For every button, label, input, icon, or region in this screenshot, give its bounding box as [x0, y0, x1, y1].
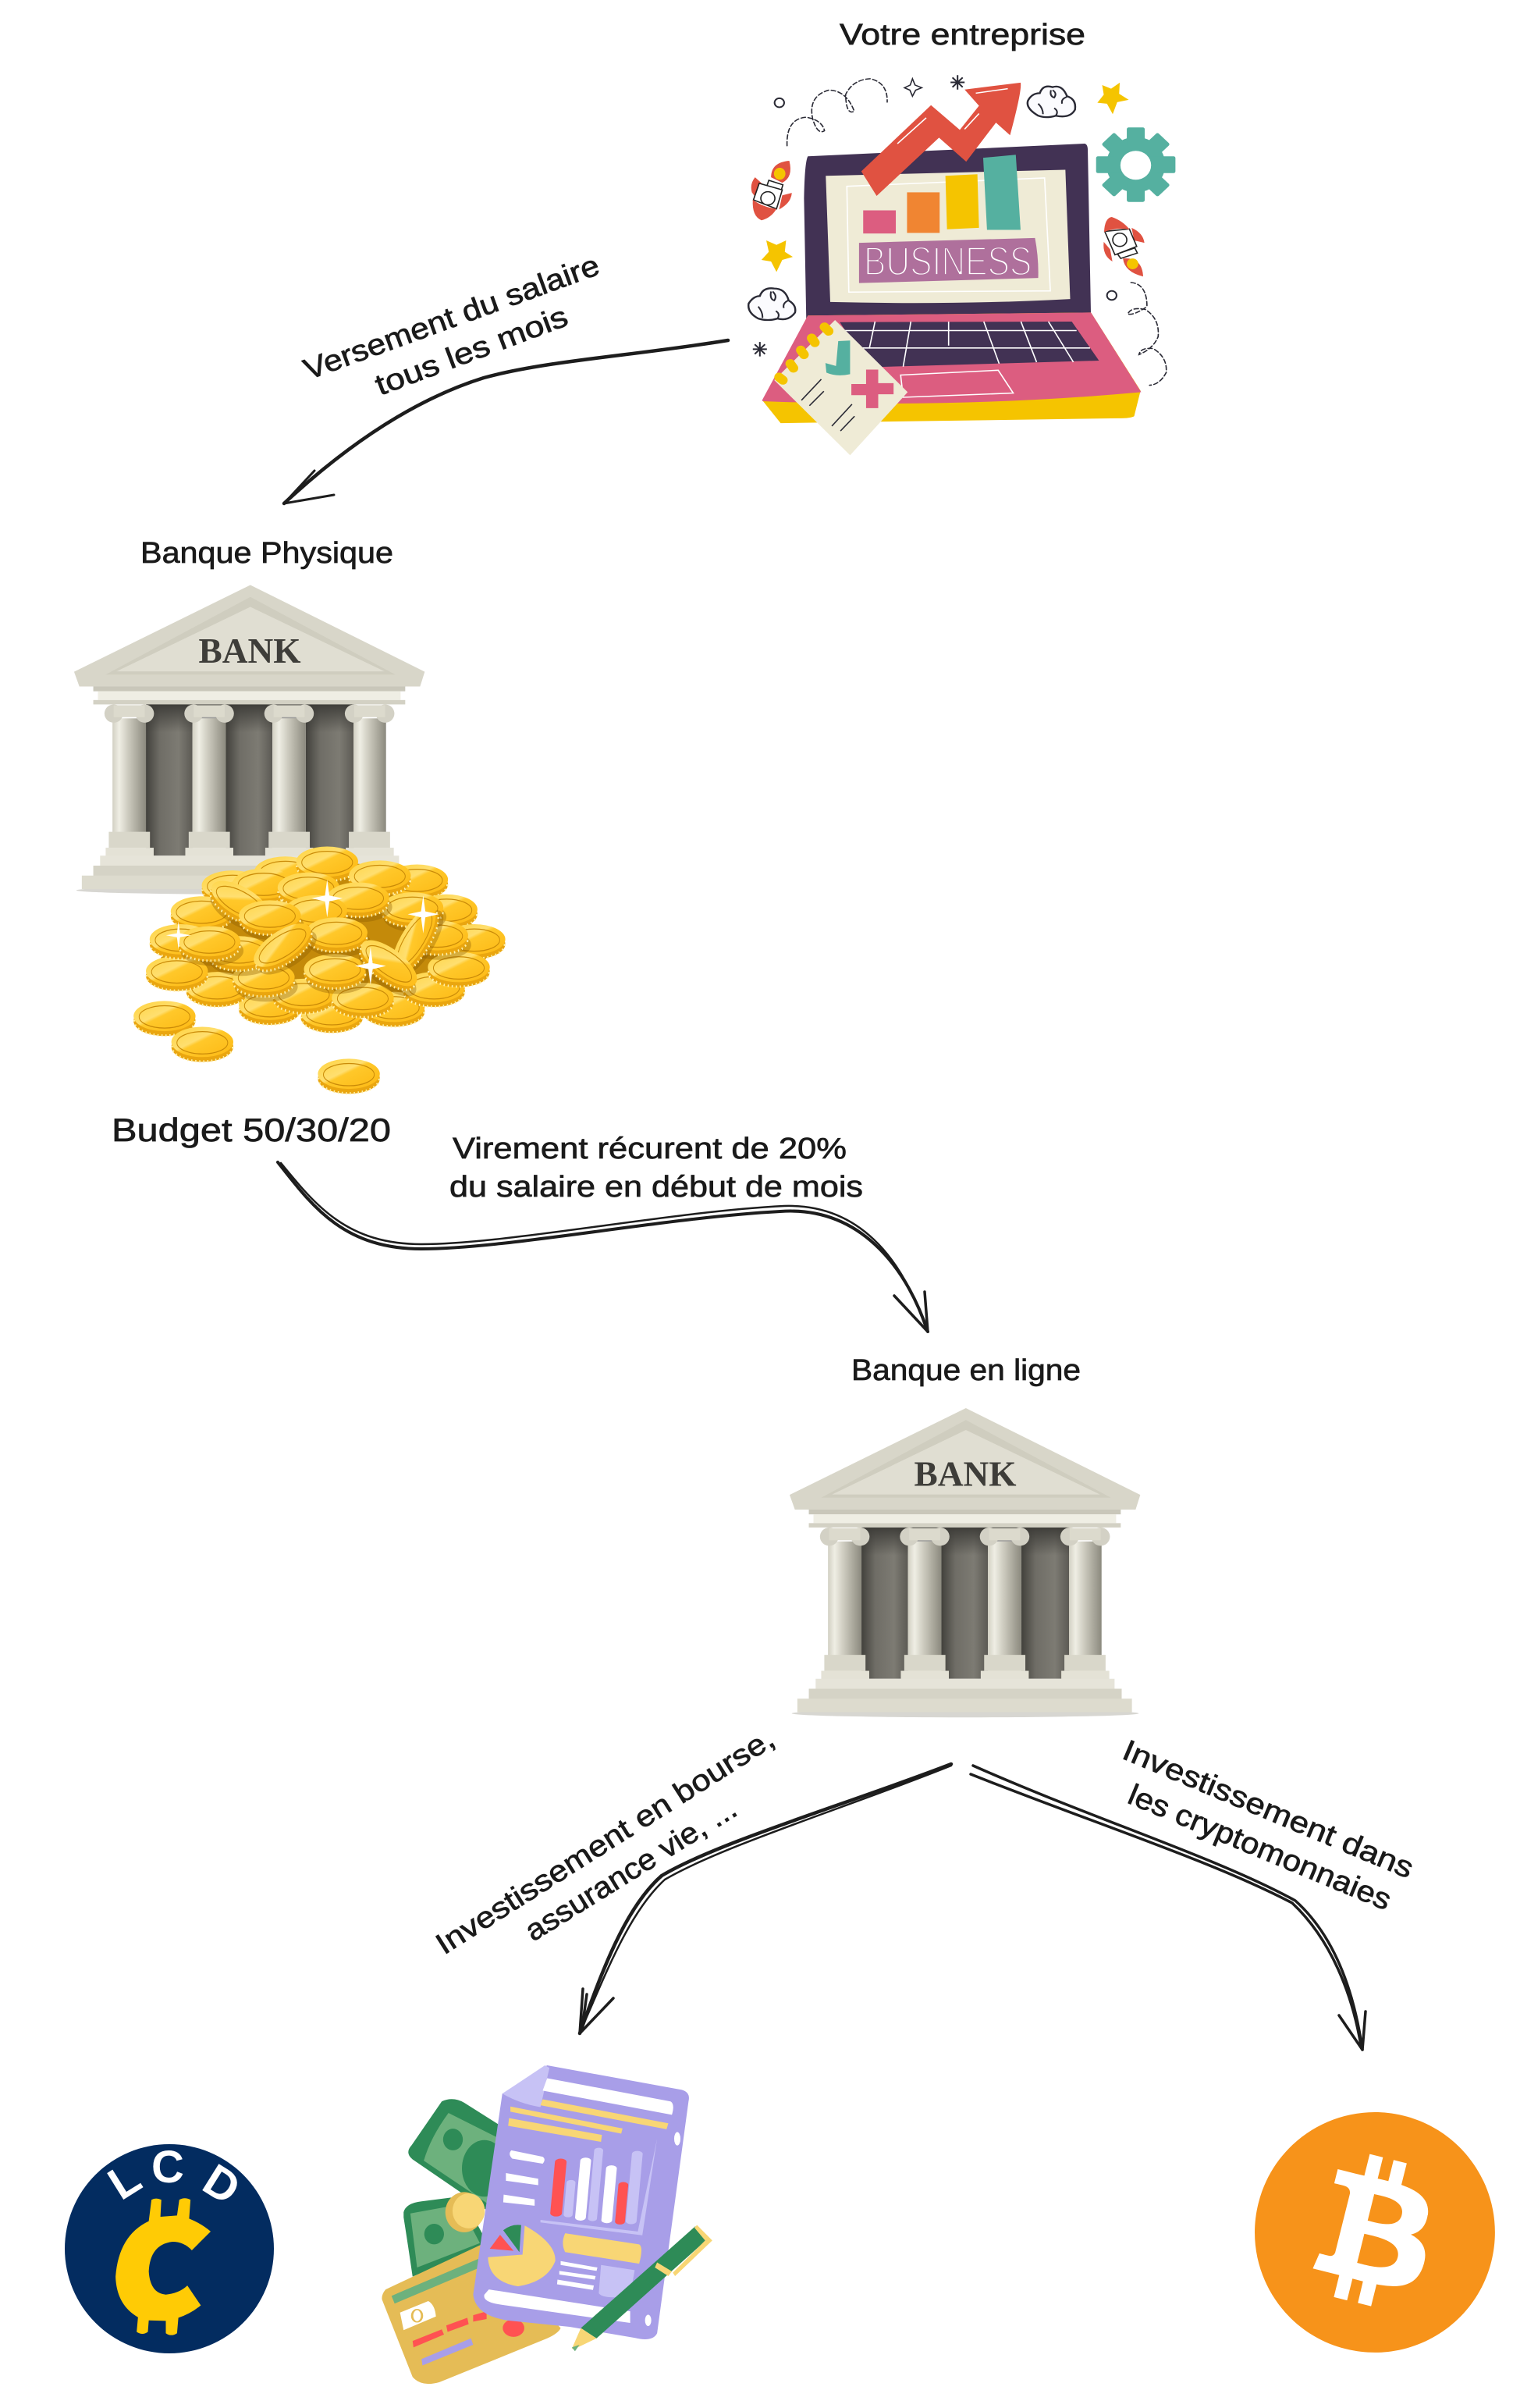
label: investissement en bourse: assurance vie, ... — [520, 1792, 743, 1948]
icon: online bank building: BANK — [915, 1453, 1017, 1493]
label: investissement en bourse: Investissement en bourse, — [430, 1723, 780, 1962]
letters L C D — [99, 2142, 249, 2214]
label: virement récurrent: du salaire en début de mois — [449, 1171, 863, 1204]
clouds — [748, 87, 1075, 320]
label: investissement crypto: Investissement dans — [1118, 1734, 1419, 1885]
icon: online bank building — [790, 1408, 1140, 1717]
label: Budget 50/30/20: Budget 50/30/20 — [112, 1112, 391, 1148]
doodles and dashed loops — [753, 75, 1167, 386]
icon: investment documents, money and card — [382, 2065, 712, 2384]
logo: LCD coin — [65, 2142, 274, 2353]
notepad — [774, 320, 907, 455]
coin C symbol — [115, 2198, 211, 2335]
laptop screen — [804, 144, 1091, 318]
label: investissement crypto — [1118, 1734, 1419, 1917]
laptop keyboard base — [762, 312, 1142, 423]
icon: laptop business illustration — [748, 75, 1175, 455]
icon: physical bank building: BANK — [199, 631, 301, 670]
title: Votre entreprise: Votre entreprise — [840, 19, 1085, 52]
pen — [572, 2225, 712, 2351]
label: investissement crypto: les cryptomonnaies — [1124, 1779, 1396, 1917]
gear — [1096, 127, 1175, 202]
letters L C D: C — [151, 2142, 184, 2193]
red growth arrow — [861, 83, 1021, 196]
stars — [762, 83, 1129, 272]
arrow: online bank to stock market investments — [580, 1764, 951, 2033]
arrow: enterprise to physical bank — [284, 340, 728, 503]
laptop screen: BUSINESS — [864, 239, 1032, 284]
title: Banque Physique: Banque Physique — [140, 537, 393, 570]
label: versement du salaire: Versement du salaire — [300, 249, 604, 386]
title: Banque en ligne: Banque en ligne — [851, 1354, 1081, 1387]
arrow: physical bank to online bank — [278, 1162, 928, 1332]
label: virement récurrent: Virement récurent de 20% — [453, 1133, 847, 1165]
letters L C D: L — [99, 2152, 150, 2210]
letters L C D: D — [194, 2154, 249, 2214]
rockets — [751, 161, 1145, 276]
arrow: online bank to cryptocurrencies — [971, 1766, 1366, 2050]
label: virement récurrent — [449, 1133, 863, 1204]
logo: bitcoin — [1255, 2112, 1495, 2353]
banknotes and coin — [403, 2099, 507, 2277]
icon: physical bank building — [74, 585, 424, 895]
label: versement du salaire: tous les mois — [371, 301, 573, 402]
credit card — [382, 2243, 560, 2384]
icon: pile of gold coins — [133, 847, 506, 1094]
report document — [473, 2065, 689, 2339]
